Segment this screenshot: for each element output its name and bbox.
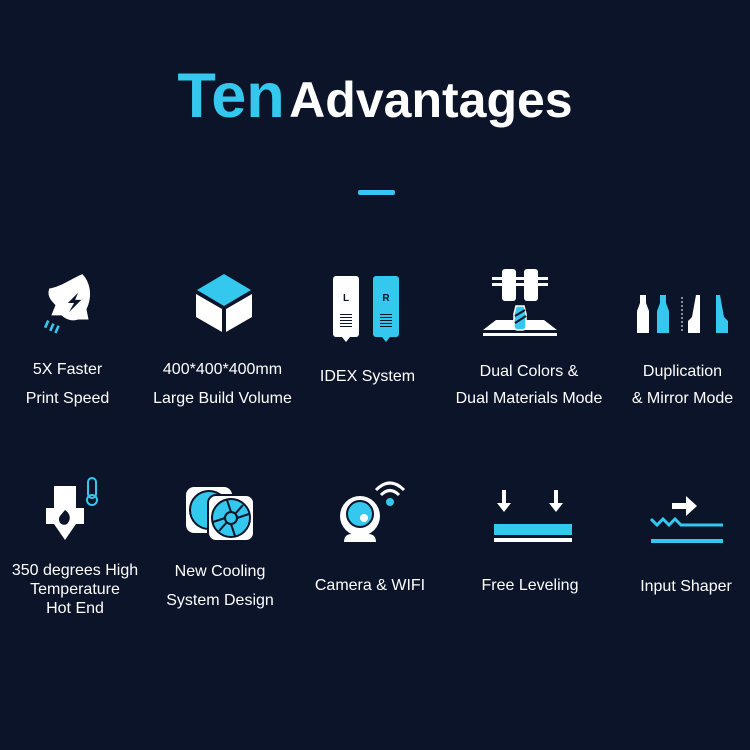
text: hot end xyxy=(12,562,138,617)
icon: IDEX xyxy=(333,276,399,342)
icon: leveling xyxy=(494,490,572,542)
text: 400 volume: Large Build Volume xyxy=(153,390,292,407)
text: dual colors xyxy=(456,363,602,407)
icon: rocket xyxy=(44,274,90,334)
text: hot end: 350 degrees High xyxy=(12,562,138,579)
title: Ten Advantages xyxy=(177,61,573,131)
icon: IDEX: L xyxy=(343,293,349,304)
text: 400 volume xyxy=(153,361,292,407)
text: 5X Faster: 5X Faster xyxy=(33,361,102,378)
icon: IDEX: R xyxy=(382,293,390,304)
icon: camera wifi xyxy=(340,481,405,542)
icon: dual colors xyxy=(483,269,557,336)
icon: fans xyxy=(186,487,253,540)
icon: hot end xyxy=(46,477,98,540)
text: 400 volume: 400*400*400mm xyxy=(163,361,282,378)
text: cooling: New Cooling xyxy=(175,563,265,580)
text: hot end: Temperature xyxy=(30,581,120,598)
icon: input shaper xyxy=(650,496,723,543)
text: dual colors: Dual Materials Mode xyxy=(456,390,602,407)
text: leveling: Free Leveling xyxy=(482,577,578,594)
text: dual colors: Dual Colors & xyxy=(480,363,578,380)
icon: cube xyxy=(196,274,252,332)
text: 5X Faster: Print Speed xyxy=(26,390,109,407)
text: hot end: Hot End xyxy=(46,600,104,617)
text: cooling xyxy=(166,563,274,609)
text: duplication xyxy=(632,363,733,407)
title underline xyxy=(358,190,395,195)
text: 5X Faster xyxy=(26,361,109,407)
text: IDEX: IDEX System xyxy=(320,368,415,385)
text: cooling: System Design xyxy=(166,592,274,609)
text: duplication: & Mirror Mode xyxy=(632,390,733,407)
text: camera: Camera & WIFI xyxy=(315,577,425,594)
icon: duplication xyxy=(637,295,728,333)
text: duplication: Duplication xyxy=(643,363,722,380)
text: input shaper: Input Shaper xyxy=(640,578,732,595)
